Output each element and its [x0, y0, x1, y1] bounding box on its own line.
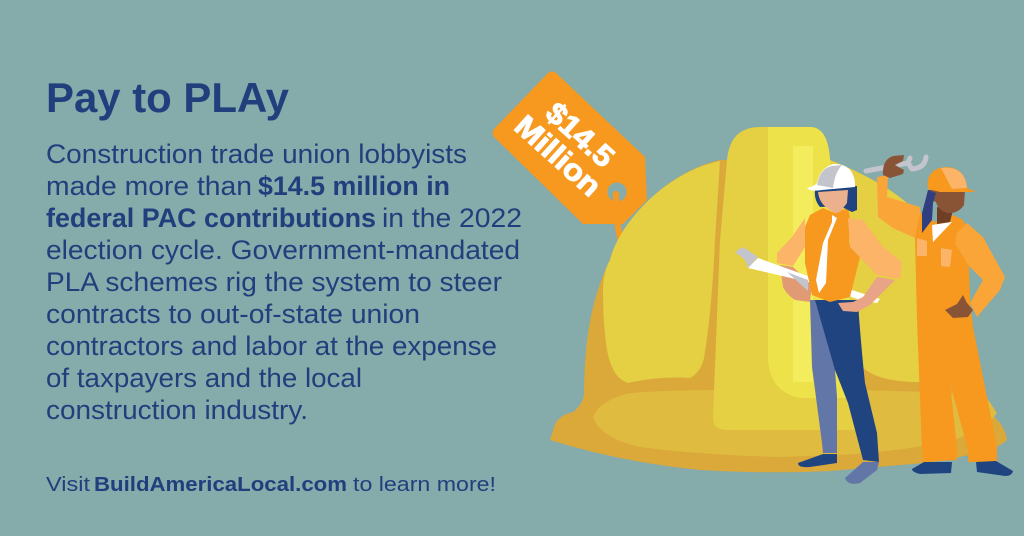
vest	[805, 208, 860, 302]
call to action: to learn more!	[353, 474, 496, 496]
hand on hip	[945, 295, 973, 318]
tie	[816, 215, 837, 293]
pants	[810, 300, 840, 453]
tag label: amount: $14.5	[539, 96, 620, 174]
right forearm	[838, 277, 895, 312]
tag label: million: Million	[508, 109, 607, 203]
hair	[815, 186, 857, 212]
blueprint	[748, 258, 880, 303]
title: Pay to PLAy	[46, 74, 290, 121]
call to action	[46, 474, 496, 496]
body text block: federal PAC contributions	[46, 203, 376, 233]
neck	[937, 207, 953, 224]
left forearm	[780, 265, 812, 302]
face	[928, 190, 965, 213]
shoes	[912, 462, 952, 474]
collar and shirt	[932, 222, 952, 242]
worker: woman with blueprint	[735, 164, 902, 484]
face	[818, 190, 848, 213]
body text block: contracts to out-of-state union	[46, 299, 420, 329]
body text block: Construction trade union lobbyists	[46, 139, 467, 169]
right sleeve	[848, 218, 902, 279]
ponytail	[922, 190, 936, 233]
body text block: of taxpayers and the local	[46, 363, 362, 393]
raised arm	[877, 175, 922, 238]
worker: woman with wrench	[866, 155, 1013, 476]
body text block	[46, 139, 522, 425]
wrench	[866, 157, 926, 171]
body text block: $14.5 million in	[258, 171, 450, 201]
call to action: BuildAmericaLocal.com	[94, 474, 347, 496]
coverall	[915, 213, 997, 462]
right arm	[955, 223, 1005, 317]
hard hat	[928, 167, 976, 192]
body text block: made more than	[46, 171, 252, 201]
body text block: contractors and labor at the expense	[46, 331, 497, 361]
body text block: in the 2022	[382, 203, 522, 233]
body text block: construction industry.	[46, 395, 308, 425]
call to action: Visit	[46, 474, 91, 496]
pockets	[917, 238, 927, 256]
body text block: PLA schemes rig the system to steer	[46, 267, 502, 297]
body text block: election cycle. Government-mandated	[46, 235, 520, 265]
raised hand	[883, 155, 904, 178]
hard hat	[807, 164, 855, 191]
shoes	[798, 454, 837, 467]
left sleeve	[777, 218, 805, 266]
price tag	[492, 72, 647, 245]
illustration: giant hard hat	[550, 127, 1007, 472]
